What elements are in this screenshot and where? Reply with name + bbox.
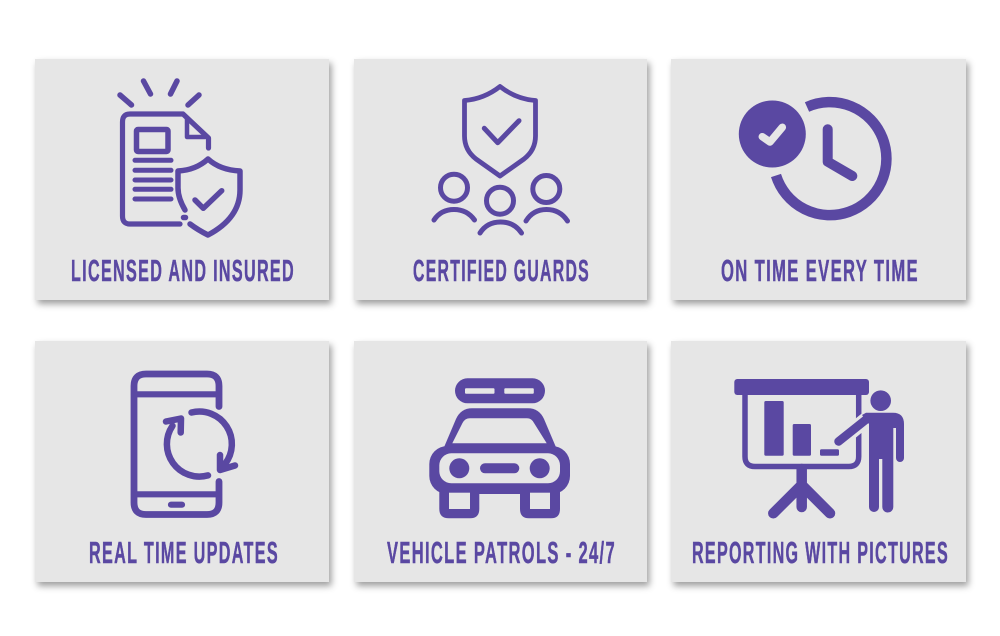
panel: certified guards — [354, 59, 647, 300]
panel: real time updates — [35, 341, 329, 582]
label: licensed and insured: LICENSED AND INSURED — [71, 254, 295, 288]
label: vehicle patrols 24/7: VEHICLE PATROLS - 24/7 — [387, 536, 616, 570]
icon: document with shield — [120, 81, 240, 235]
panel: on time every time — [671, 59, 966, 300]
panel: vehicle patrols — [354, 341, 647, 582]
icon: patrol car — [429, 378, 570, 518]
label: real time updates: REAL TIME UPDATES — [89, 536, 279, 570]
icon: shield over three people — [434, 86, 568, 233]
panel: reporting with pictures — [671, 341, 966, 582]
panel: licensed and insured — [35, 59, 329, 300]
label: certified guards: CERTIFIED GUARDS — [413, 254, 590, 288]
icon: clock with check badge — [739, 100, 886, 215]
icon: presenter with chart — [734, 379, 904, 513]
icon: smartphone with sync arrows — [134, 374, 235, 514]
